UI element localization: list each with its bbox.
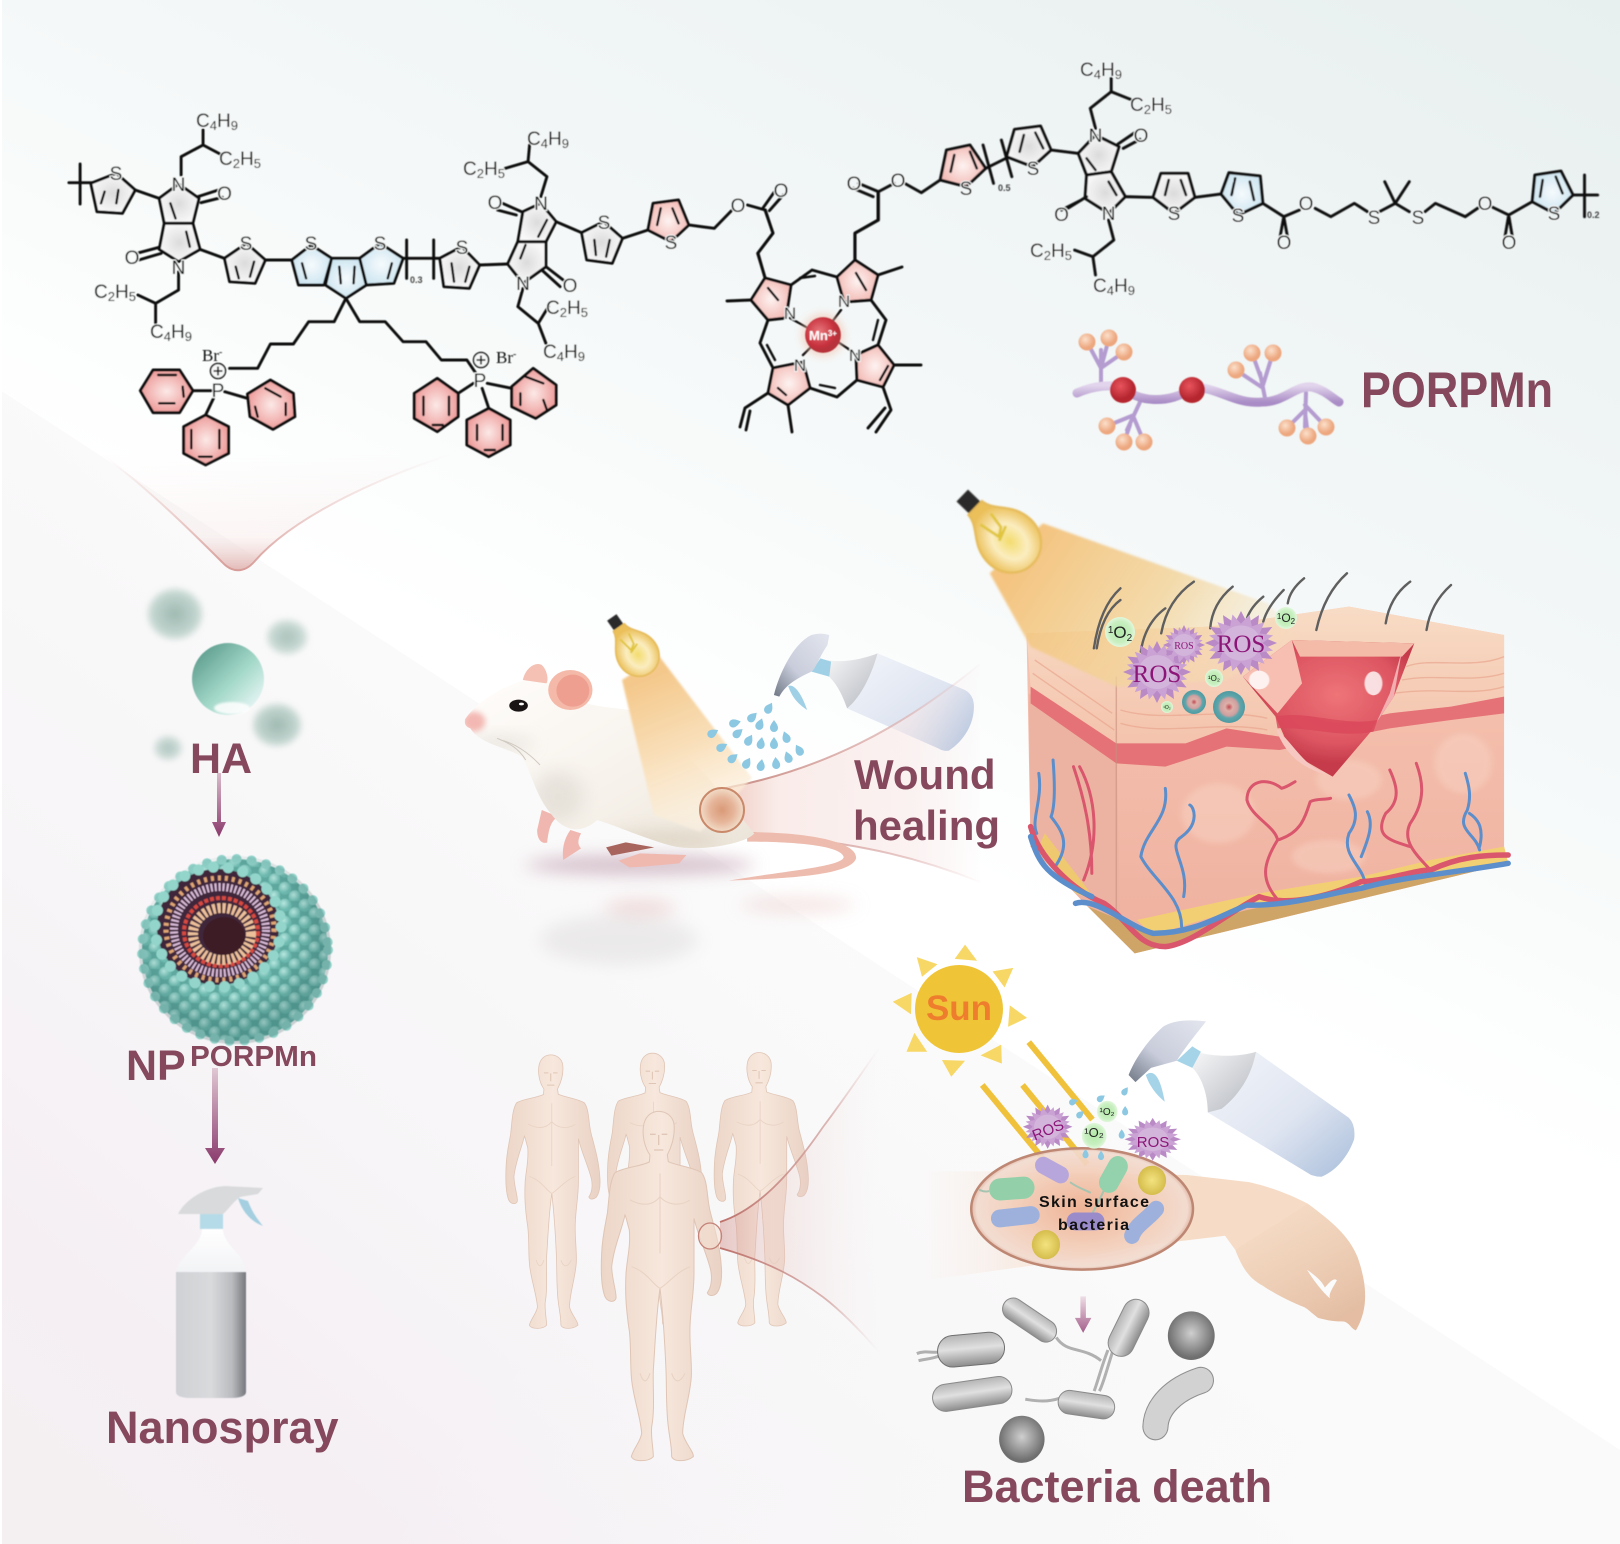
arrow to dead bacteria	[1075, 1296, 1091, 1333]
counter-ions, charges and subscripts	[202, 183, 1600, 378]
singlet oxygen markers on skin: 2	[1291, 617, 1296, 626]
counter-ions, charges and subscripts: Br	[202, 346, 219, 365]
alkyl group labels: 5	[1165, 102, 1172, 117]
alkyl group labels: 4	[1107, 283, 1114, 298]
alkyl group labels: 9	[562, 136, 569, 151]
counter-ions, charges and subscripts: -	[513, 349, 516, 360]
alkyl group labels: 9	[1128, 283, 1135, 298]
atom labels: S	[1232, 206, 1244, 227]
alkyl group labels: H	[115, 282, 129, 303]
atom labels: N	[172, 258, 185, 279]
epidermis texture	[1033, 657, 1504, 730]
counter-ions, charges and subscripts: Mn	[809, 328, 828, 343]
porphyrin ring	[727, 192, 921, 432]
wound	[1243, 640, 1414, 777]
singlet oxygen markers on skin: O	[1113, 623, 1127, 642]
alkyl group labels	[94, 60, 1172, 364]
singlet oxygen markers on skin: O	[1281, 611, 1291, 625]
alkyl group labels: H	[1101, 60, 1115, 81]
alkyl group labels: 9	[1115, 67, 1122, 82]
label: Skin surface bacteria: bacteria	[1058, 1217, 1129, 1234]
front figure	[601, 1111, 722, 1461]
right polymer bonds	[853, 78, 1598, 275]
alkyl group labels: 4	[210, 118, 217, 133]
atom labels: S	[665, 233, 677, 254]
atom labels: O	[1478, 194, 1492, 215]
block corner edge	[1115, 677, 1117, 920]
atom labels: S	[374, 234, 386, 255]
alkyl group labels: 2	[108, 289, 115, 304]
alkyl group labels: C	[1080, 60, 1094, 81]
alkyl group labels: C	[546, 298, 560, 319]
alkyl group labels: 4	[164, 329, 171, 344]
singlet oxygen labels above arm: ¹O₂	[1100, 1107, 1115, 1118]
label: Wound healing	[853, 751, 1000, 849]
alkyl group labels: 9	[231, 118, 238, 133]
singlet oxygen markers on skin: ¹O₂	[1163, 705, 1171, 711]
atom labels: O	[1054, 205, 1069, 226]
nanoparticle	[139, 856, 331, 1044]
label: Skin surface bacteria	[1039, 1194, 1149, 1234]
alkyl group labels: 2	[560, 305, 567, 320]
atom labels: O	[1277, 233, 1291, 254]
atom labels: N	[534, 194, 548, 215]
atom labels: S	[598, 213, 610, 234]
counter-ions, charges and subscripts: 0.3	[410, 275, 423, 285]
dermis mottling	[1182, 733, 1492, 873]
singlet oxygen above arm	[1082, 1101, 1118, 1149]
label: Wound healing: healing	[853, 802, 1000, 849]
singlet oxygen markers on skin: 1	[1277, 612, 1282, 621]
alkyl group labels: C	[543, 342, 557, 363]
alkyl group labels: C	[219, 149, 233, 170]
alkyl group labels: H	[1114, 276, 1128, 297]
blood vessels	[1031, 760, 1508, 947]
atom labels: S	[110, 164, 122, 185]
ROS bursts above arm	[1020, 1102, 1185, 1163]
atom labels: O	[563, 276, 577, 297]
alkyl group labels: C	[1030, 241, 1044, 262]
alkyl group labels: 9	[578, 349, 585, 364]
label: Bacteria death: Bacteria death	[962, 1461, 1272, 1512]
mouse body	[462, 679, 754, 848]
wound healing scene: mouse	[462, 664, 856, 965]
mouse shadow and reflection	[526, 855, 854, 965]
legs and feet	[537, 810, 686, 867]
label: NP with PORPMn superscript: NP	[126, 1042, 186, 1090]
alkyl group labels: H	[548, 129, 562, 150]
spray bottle over arm	[1129, 1020, 1354, 1177]
sun: Sun	[926, 989, 992, 1028]
spray droplets	[706, 701, 805, 772]
label: HA: HA	[190, 735, 252, 783]
singlet oxygen markers on skin: 1	[1108, 625, 1114, 636]
left face shading	[1029, 693, 1120, 923]
chemical structure of PORPMn	[69, 60, 1600, 465]
nanoparticles on skin	[1182, 690, 1245, 723]
atom labels: O	[847, 174, 861, 195]
atom labels: S	[960, 179, 972, 200]
atom labels: S	[1412, 208, 1424, 229]
atom labels: S	[456, 238, 468, 259]
label: Skin surface bacteria: Skin surface	[1039, 1194, 1149, 1211]
counter-ions, charges and subscripts: 3+	[828, 329, 837, 338]
mouse ears	[523, 664, 592, 710]
light rays	[982, 1042, 1092, 1164]
tail	[729, 832, 856, 881]
atom labels: O	[1502, 233, 1516, 254]
atom labels: N	[838, 292, 850, 311]
atom labels: O	[1299, 194, 1313, 215]
alkyl group labels: H	[484, 159, 498, 180]
fat layer	[1137, 847, 1508, 935]
bulb on skin	[941, 474, 1054, 585]
arm and hand	[925, 1171, 1365, 1330]
dermis	[1027, 607, 1508, 953]
atom labels: O	[1134, 126, 1148, 147]
arrow: HA to nanoparticle	[212, 773, 226, 837]
alkyl group labels: C	[1093, 276, 1107, 297]
singlet oxygen markers on skin: 2	[1127, 633, 1133, 644]
atom labels: S	[1168, 204, 1180, 225]
atom labels: N	[172, 175, 185, 196]
skin magnifier oval	[971, 1148, 1193, 1270]
alkyl group labels: 5	[581, 305, 588, 320]
alkyl group labels: 5	[498, 166, 505, 181]
atom labels: S	[1548, 204, 1560, 225]
mouse whiskers	[497, 738, 540, 765]
alkyl group labels: H	[171, 322, 185, 343]
atom labels: N	[849, 346, 861, 365]
atom labels: S	[1027, 159, 1039, 180]
alkyl group labels: 4	[557, 349, 564, 364]
alkyl group labels: 4	[541, 136, 548, 151]
counter-ions, charges and subscripts: Br	[496, 348, 513, 367]
atom labels: O	[774, 181, 788, 202]
label: Wound healing: Wound	[854, 751, 996, 798]
sun	[893, 945, 1027, 1077]
singlet oxygen labels above arm	[1084, 1107, 1115, 1140]
light cone on skin	[990, 523, 1300, 687]
zoom fan: person to arm	[720, 1047, 880, 1353]
alkyl group labels: 2	[477, 166, 484, 181]
wrist circle	[698, 1223, 722, 1249]
left polymer bonds	[69, 130, 783, 465]
singlet oxygen markers on skin	[1105, 607, 1297, 713]
atom labels: N	[794, 356, 806, 375]
atom labels: N	[784, 304, 796, 323]
back figures	[506, 1053, 808, 1328]
atom labels	[110, 126, 1560, 402]
alkyl group labels: C	[527, 129, 541, 150]
bulb on mouse	[595, 605, 668, 685]
atom labels: O	[488, 193, 502, 214]
counter-ions, charges and subscripts: 0.5	[998, 183, 1011, 193]
atom labels: S	[240, 234, 252, 255]
atom labels: S	[305, 234, 317, 255]
alkyl group labels: C	[463, 159, 477, 180]
alkyl group labels: C	[150, 322, 164, 343]
alkyl group labels: H	[1051, 241, 1065, 262]
alkyl group labels: 5	[129, 289, 136, 304]
alkyl group labels: 9	[185, 329, 192, 344]
alkyl group labels: C	[196, 111, 210, 132]
ROS labels above arm: ROS	[1137, 1134, 1169, 1151]
label: NP with PORPMn superscript: PORPMn	[190, 1041, 317, 1073]
alkyl group labels: H	[567, 298, 581, 319]
alkyl group labels: H	[1151, 95, 1165, 116]
alkyl group labels: H	[240, 149, 254, 170]
singlet oxygen labels above arm: ¹O₂	[1084, 1125, 1104, 1140]
label: NP with PORPMn superscript	[126, 1041, 317, 1090]
atom labels: P	[474, 371, 486, 392]
ROS bursts on skin: ROS	[1174, 641, 1194, 652]
label: Nanospray: Nanospray	[106, 1402, 339, 1453]
epidermis	[1027, 607, 1504, 743]
polymer chain cartoon	[1077, 330, 1339, 450]
nanospray bottle	[176, 1186, 263, 1398]
atom labels: O	[125, 248, 139, 269]
alkyl group labels: 5	[1065, 248, 1072, 263]
bacteria-killing scene: arm	[917, 1020, 1365, 1463]
ROS labels above arm: ROS	[1030, 1116, 1066, 1144]
alkyl group labels: H	[217, 111, 231, 132]
heading: PORPMn: PORPMn	[1361, 362, 1553, 418]
alkyl group labels: 2	[1144, 102, 1151, 117]
alkyl group labels: C	[1130, 95, 1144, 116]
wound spot on mouse	[700, 788, 744, 832]
alkyl group labels: H	[564, 342, 578, 363]
light cone on mouse	[622, 656, 752, 832]
alkyl group labels: 5	[254, 156, 261, 171]
HA spheres	[148, 589, 307, 760]
spray bottle over mouse	[774, 634, 974, 751]
singlet oxygen markers on skin: ¹O₂	[1208, 674, 1220, 683]
funnel from polymer to HA	[103, 452, 458, 570]
arrow: nanoparticle to nanospray	[205, 1068, 225, 1164]
ROS labels above arm	[1030, 1116, 1169, 1151]
Mn center	[801, 313, 845, 357]
zoom fan: wound	[726, 664, 980, 882]
atom labels: N	[1102, 204, 1115, 225]
alkyl group labels: 2	[1044, 248, 1051, 263]
dead bacteria	[917, 1294, 1215, 1463]
atom labels: O	[217, 184, 232, 205]
counter-ions, charges and subscripts: -	[219, 347, 222, 358]
atom labels: O	[731, 196, 745, 217]
atom labels: N	[1089, 126, 1102, 147]
human figures	[506, 1053, 808, 1461]
droplets around arm	[1068, 1085, 1130, 1160]
atom labels: N	[516, 274, 530, 295]
atom labels: P	[212, 381, 224, 402]
counter-ions, charges and subscripts: 0.2	[1587, 210, 1600, 220]
ROS bursts on skin: ROS	[1217, 631, 1265, 658]
bacteria on skin	[979, 1152, 1166, 1259]
alkyl group labels: 2	[233, 156, 240, 171]
alkyl group labels: 4	[1094, 67, 1101, 82]
skin block with wound	[941, 474, 1508, 953]
ROS bursts on skin	[1119, 607, 1282, 707]
atom labels: S	[1368, 208, 1380, 229]
hairs	[1094, 573, 1451, 652]
atom labels: O	[891, 171, 905, 192]
alkyl group labels: C	[94, 282, 108, 303]
ROS bursts on skin: ROS	[1133, 661, 1181, 688]
red dermal band	[1031, 687, 1504, 767]
mouse eye	[509, 700, 528, 712]
